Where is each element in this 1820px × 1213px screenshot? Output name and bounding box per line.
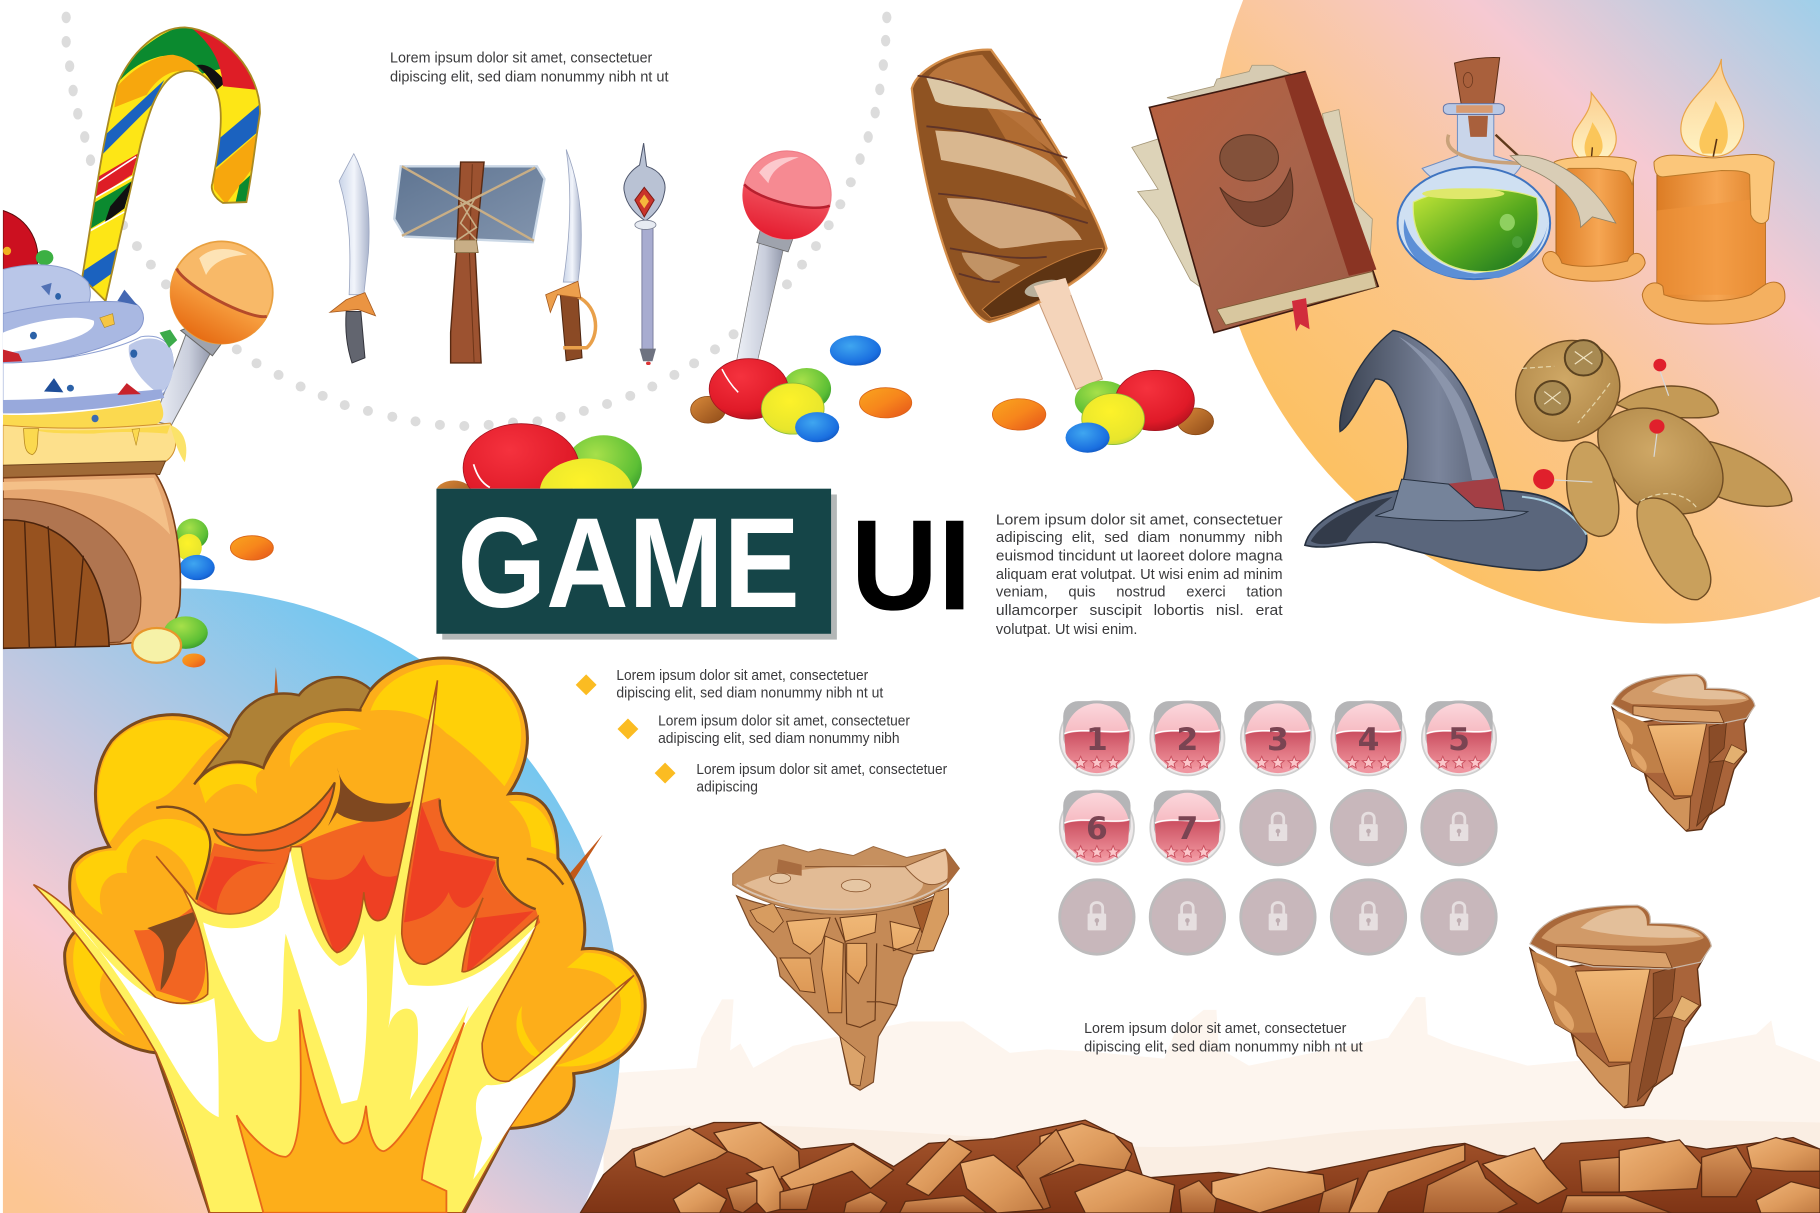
level 1: 1	[1086, 722, 1108, 758]
level 4: 4	[1358, 722, 1379, 758]
floating rock: middle	[733, 845, 959, 1090]
level selector grid	[1060, 701, 1496, 954]
level 2: 2	[1177, 722, 1198, 758]
level 5: 5	[1448, 722, 1470, 758]
text block: description: volutpat. Ut wisi enim.	[996, 622, 1138, 638]
level 6: 6	[1086, 811, 1108, 847]
frosting	[3, 265, 90, 324]
text block: bottom: Lorem ipsum dolor sit amet, consectetuer	[1084, 1021, 1347, 1037]
blast white	[67, 851, 612, 1180]
smoke	[194, 677, 371, 784]
door arch	[3, 499, 141, 648]
icon: large candle	[1642, 59, 1785, 324]
bullet 2: adipiscing elit, sed diam nonummy nibh	[658, 731, 900, 747]
house body	[3, 474, 180, 648]
text block: bottom: dipiscing elit, sed diam nonummy nibh nt ut	[1084, 1040, 1363, 1056]
text block: top: dipiscing elit, sed diam nonummy nibh nt ut	[390, 69, 669, 85]
icon: potion bottle	[1398, 57, 1616, 279]
text block: description	[996, 513, 1284, 638]
door	[3, 520, 109, 648]
thin spikes	[272, 667, 603, 894]
level 7: 7	[1177, 811, 1198, 847]
dotted path	[62, 12, 891, 431]
candies: right group	[1066, 370, 1214, 453]
icon: witch hat	[1305, 330, 1587, 570]
icon: orange lollipop stick	[154, 326, 222, 425]
inner fire	[196, 798, 540, 998]
bullet 3: adipiscing	[696, 780, 758, 796]
icon: stone hammer	[394, 162, 544, 363]
candy: blue	[830, 335, 881, 366]
text block: description: veniam, quis nostrud exerci tation	[996, 585, 1283, 601]
text block: top	[390, 51, 669, 85]
blast core	[237, 1009, 464, 1213]
text block: bottom	[1084, 1021, 1363, 1056]
text block: description: aliquam erat volutpat. Ut wisi enim ad minim	[996, 567, 1283, 583]
bullet 3: Lorem ipsum dolor sit amet, consectetuer	[696, 762, 947, 778]
title: GAME UI: GAME	[457, 492, 800, 635]
floating rock: top right	[1612, 674, 1755, 831]
icon: sword	[330, 154, 376, 363]
title candies	[436, 423, 642, 489]
candies under house	[132, 616, 208, 667]
icon: magic staff	[624, 143, 665, 365]
candies behind house	[177, 519, 208, 549]
bullet 2: Lorem ipsum dolor sit amet, consectetuer	[658, 713, 910, 729]
bullet 1	[576, 668, 883, 702]
mid rock faces	[727, 1129, 1752, 1213]
cloud	[65, 658, 645, 1213]
band	[3, 461, 165, 479]
level 6	[1060, 790, 1134, 865]
bullet 1: dipiscing elit, sed diam nonummy nibh nt ut	[616, 686, 883, 702]
gradient circle: bottom left	[0, 588, 621, 1213]
level 5	[1422, 701, 1496, 775]
explosion	[33, 658, 645, 1213]
icon: cupcake house	[3, 211, 215, 648]
yellow lobes	[73, 665, 641, 1067]
locked levels	[1060, 790, 1496, 954]
bullet 2	[618, 713, 910, 747]
level 3: 3	[1267, 722, 1289, 758]
ground rocks	[580, 1120, 1820, 1213]
level 3	[1241, 701, 1315, 775]
text block: description: adipiscing elit, sed diam nonummy nibh	[996, 530, 1283, 546]
text block: description: Lorem ipsum dolor sit amet, consectetuer	[996, 513, 1283, 529]
bullet list	[576, 668, 947, 796]
icon: small candle	[1542, 93, 1645, 281]
desert skyline background	[604, 997, 1820, 1213]
blast yellow	[33, 680, 634, 1213]
text block: top: Lorem ipsum dolor sit amet, consectetuer	[390, 51, 652, 67]
floating rock: bottom right	[1530, 905, 1711, 1108]
light rock faces	[634, 1122, 1820, 1213]
gradient circle: top right	[1211, 0, 1820, 624]
title: GAME UI: UI	[851, 493, 972, 637]
candy: orange	[860, 388, 912, 418]
icon: orange lollipop head	[153, 223, 291, 362]
icon: candy cane	[76, 25, 264, 301]
icon: chocolate popsicle	[912, 50, 1107, 389]
text block: description: ullamcorper suscipit lobortis nisl. erat	[996, 603, 1283, 619]
bullet 3	[655, 762, 947, 796]
icon: voodoo doll	[1507, 336, 1792, 600]
text block: description: euismod tincidunt ut laoreet dolore magna	[996, 549, 1284, 565]
level 2	[1150, 701, 1225, 775]
title: GAME UI	[436, 489, 972, 640]
icon: red lollipop	[733, 142, 840, 369]
bullet 1: Lorem ipsum dolor sit amet, consectetuer	[616, 668, 868, 684]
cream layer	[3, 423, 176, 466]
level 7	[1150, 790, 1225, 865]
icon: spell book	[1132, 65, 1378, 333]
left margin strip	[0, 0, 3, 1213]
icon: saber	[546, 149, 596, 361]
level 4	[1331, 701, 1406, 775]
candy: orange left	[230, 536, 273, 560]
yellow icing	[3, 400, 163, 432]
level 1	[1060, 701, 1134, 775]
candy: orange center	[992, 399, 1046, 430]
cherry	[3, 211, 38, 300]
candies: left group	[691, 359, 839, 442]
